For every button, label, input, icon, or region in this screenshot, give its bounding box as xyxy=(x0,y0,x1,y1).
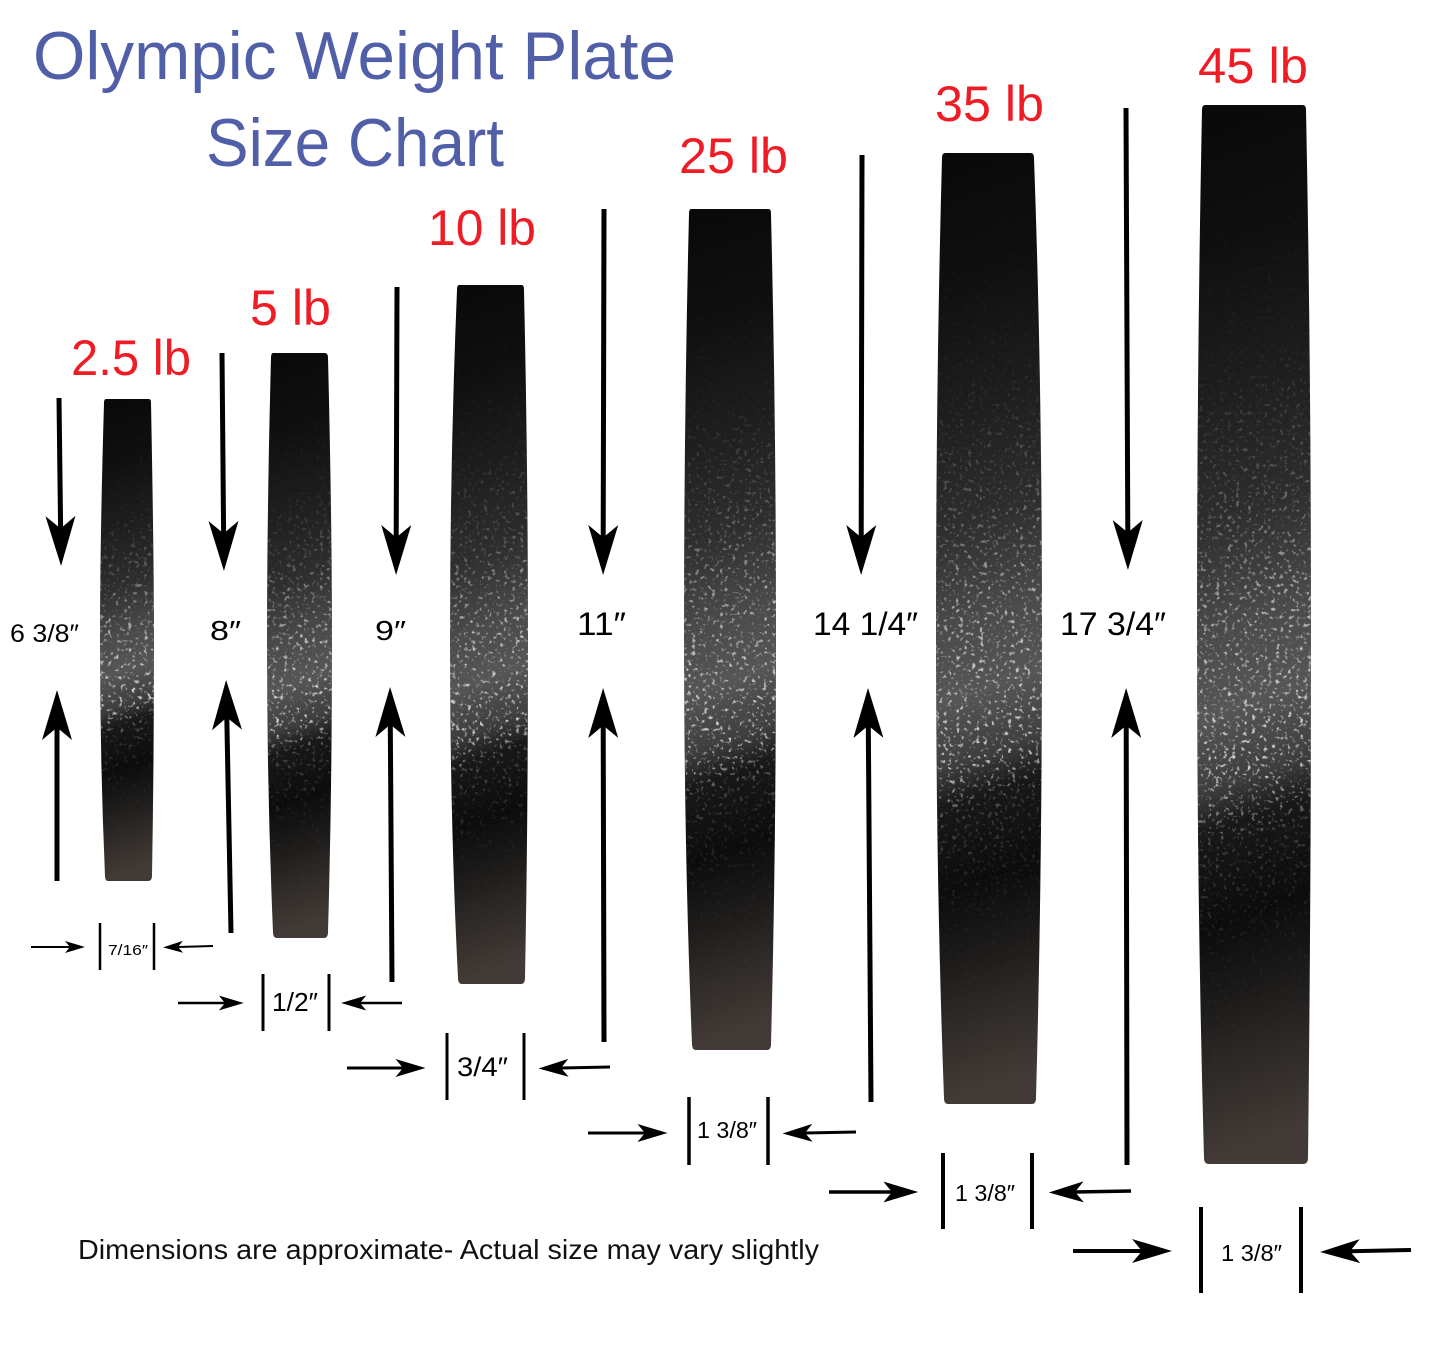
plate: 5 lb xyxy=(267,353,332,938)
plate: 35 lb xyxy=(936,153,1042,1104)
weight label: 45 lb: 45 lb xyxy=(1198,38,1308,94)
weight label: 5 lb: 5 lb xyxy=(250,280,331,336)
plate: 2.5 lb xyxy=(100,399,154,881)
diameter arrows: 11 inch xyxy=(601,209,606,1042)
thickness bracket and arrows: 1 3/8 inch xyxy=(829,1153,1131,1229)
diameter label: 14 1/4″ xyxy=(813,606,918,642)
plate column: 10 lb xyxy=(347,200,610,1100)
weight label: 10 lb: 10 lb xyxy=(428,200,536,256)
title: Size Chart xyxy=(206,105,504,181)
plate column: 45 lb xyxy=(1060,38,1411,1293)
thickness label: 1 3/8″ xyxy=(955,1180,1015,1206)
weight label: 35 lb: 35 lb xyxy=(935,76,1044,132)
diameter arrows: 8 inch xyxy=(222,353,231,933)
footnote: Dimensions are approximate- Actual size may vary slightly xyxy=(78,1234,819,1265)
thickness label: 1 3/8″ xyxy=(1221,1240,1282,1266)
plate column: 2.5 lb xyxy=(10,330,213,970)
thickness bracket and arrows: 7/16 inch xyxy=(31,923,213,970)
weight label: 25 lb: 25 lb xyxy=(679,128,788,184)
diameter arrows: 6 3/8 inch xyxy=(57,398,61,881)
thickness bracket and arrows: 1/2 inch xyxy=(178,974,402,1031)
thickness label: 1 3/8″ xyxy=(697,1117,757,1143)
diameter label: 11″ xyxy=(577,606,626,642)
plate: 10 lb xyxy=(450,285,528,984)
thickness label: 7/16″ xyxy=(108,942,149,959)
thickness bracket and arrows: 1 3/8 inch xyxy=(1073,1207,1411,1293)
weight label: 2.5 lb: 2.5 lb xyxy=(71,330,191,386)
plate column: 25 lb xyxy=(577,128,856,1165)
diameter arrows: 14 1/4 inch xyxy=(861,155,871,1102)
diameter label: 8″ xyxy=(210,615,241,646)
thickness label: 1/2″ xyxy=(272,987,318,1017)
thickness label: 3/4″ xyxy=(457,1052,508,1082)
plate: 25 lb xyxy=(684,209,776,1050)
title xyxy=(33,18,676,181)
diameter label: 17 3/4″ xyxy=(1060,606,1166,642)
plate column: 35 lb xyxy=(813,76,1131,1229)
diameter label: 9″ xyxy=(375,615,406,646)
plate: 45 lb xyxy=(1197,105,1311,1164)
diameter label: 6 3/8″ xyxy=(10,620,79,648)
plate column: 5 lb xyxy=(178,280,402,1031)
thickness bracket and arrows: 1 3/8 inch xyxy=(588,1097,856,1165)
title: Olympic Weight Plate xyxy=(33,18,676,94)
diameter arrows: 9 inch xyxy=(390,287,397,982)
thickness bracket and arrows: 3/4 inch xyxy=(347,1033,610,1100)
diameter arrows: 17 3/4 inch xyxy=(1126,108,1128,1165)
